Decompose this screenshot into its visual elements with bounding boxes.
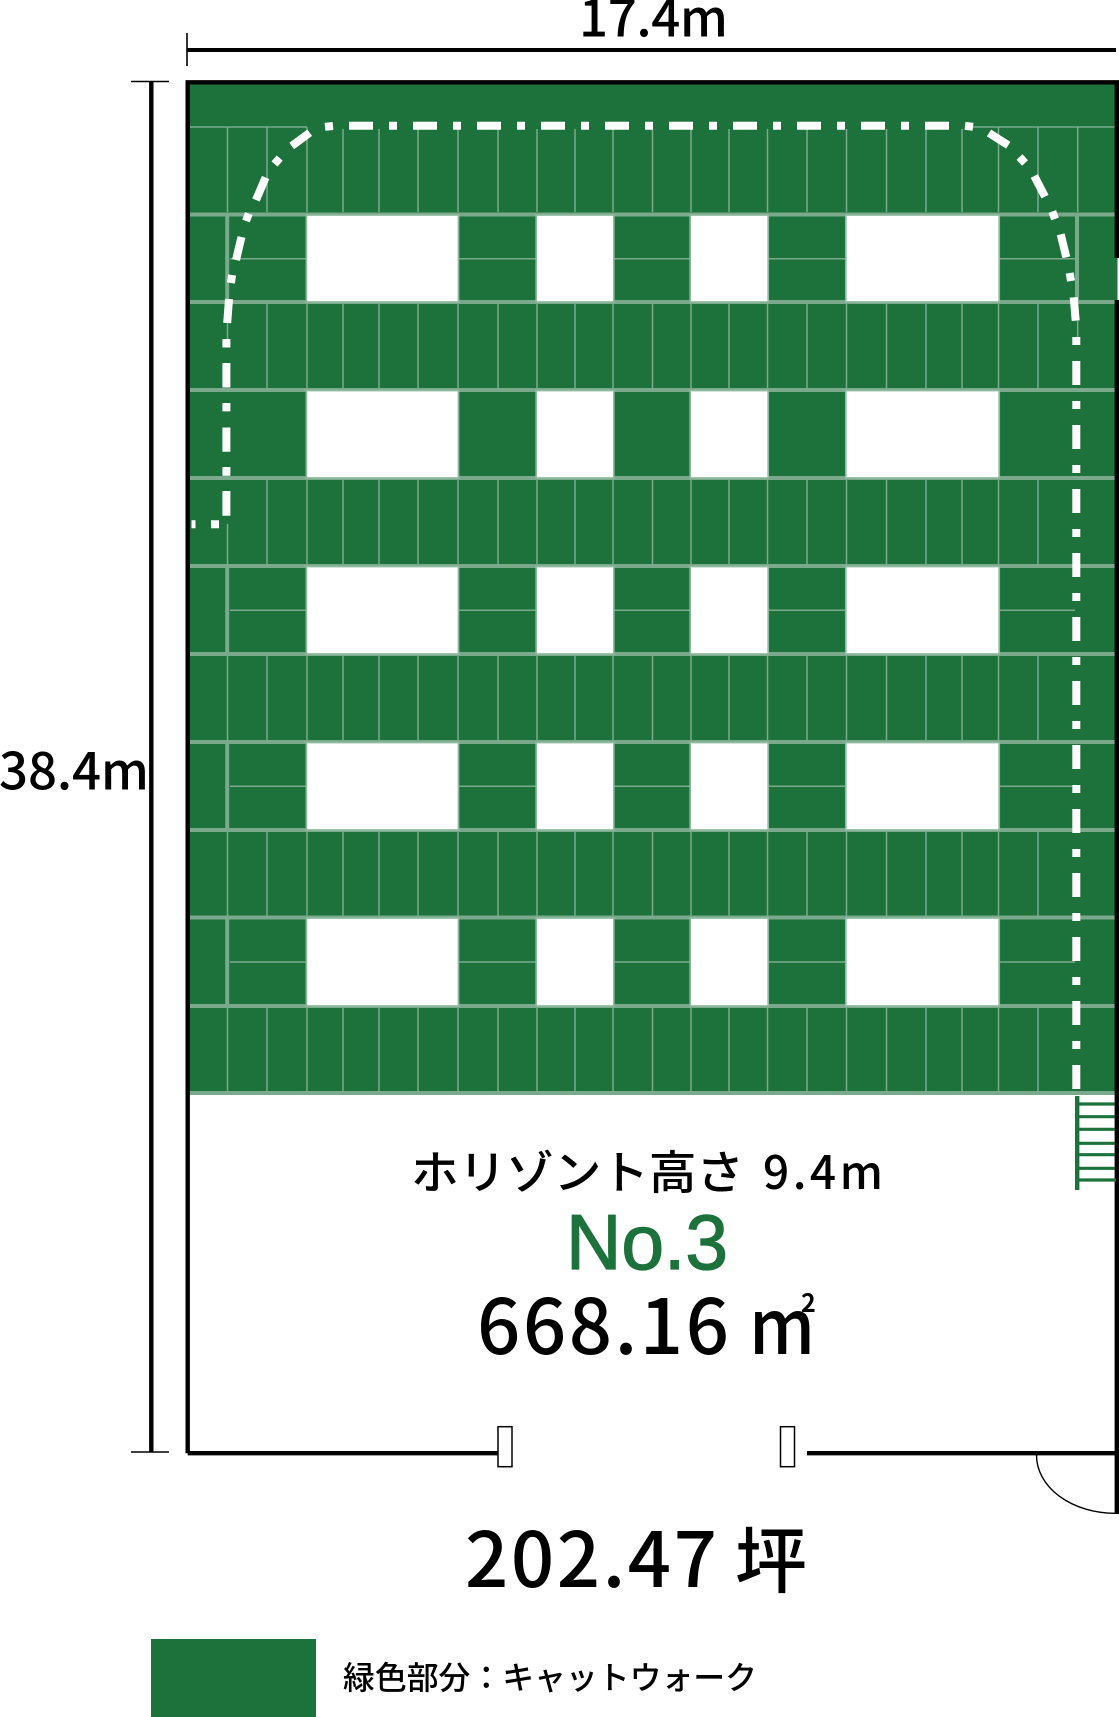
openings: row 3 — [306, 390, 999, 478]
thin grid lines — [190, 127, 1115, 1091]
floor area in square metres: m — [749, 1266, 815, 1376]
catwalk green area — [187, 82, 1118, 1093]
floor area in tsubo: 坪 — [735, 1503, 807, 1608]
column left of entrance — [498, 1427, 512, 1467]
left dimension: depth 38.4m: 38.4m — [0, 730, 149, 804]
openings: row 5 — [306, 566, 999, 654]
openings: row 9 — [306, 918, 999, 1006]
green floor — [187, 82, 1118, 1093]
legend text: 緑色部分：キャットウォーク — [343, 1653, 757, 1699]
thick row dividers — [187, 214, 1117, 1093]
column right of entrance — [780, 1427, 794, 1467]
access ladder — [1077, 1096, 1116, 1190]
floor area in tsubo: 202.47 — [465, 1499, 717, 1609]
legend swatch — [151, 1639, 316, 1717]
building walls — [188, 82, 1119, 1514]
openings: row 1 — [306, 215, 999, 302]
studio number: No.3 — [566, 1198, 728, 1286]
door swing arc — [1036, 1455, 1115, 1513]
horizon height label: ホリゾント高さ — [411, 1137, 744, 1203]
floor area in square metres: 668.16 — [477, 1266, 729, 1376]
left dimension: depth 38.4m — [0, 81, 169, 1452]
horizon height label: 9.4m — [763, 1137, 883, 1203]
floor area in square metres: 2 — [801, 1284, 816, 1320]
legend — [151, 1639, 757, 1717]
openings: row 7 — [306, 742, 999, 830]
evacuation route dash-dot line — [192, 126, 1076, 1089]
horizon height label — [411, 1137, 883, 1203]
